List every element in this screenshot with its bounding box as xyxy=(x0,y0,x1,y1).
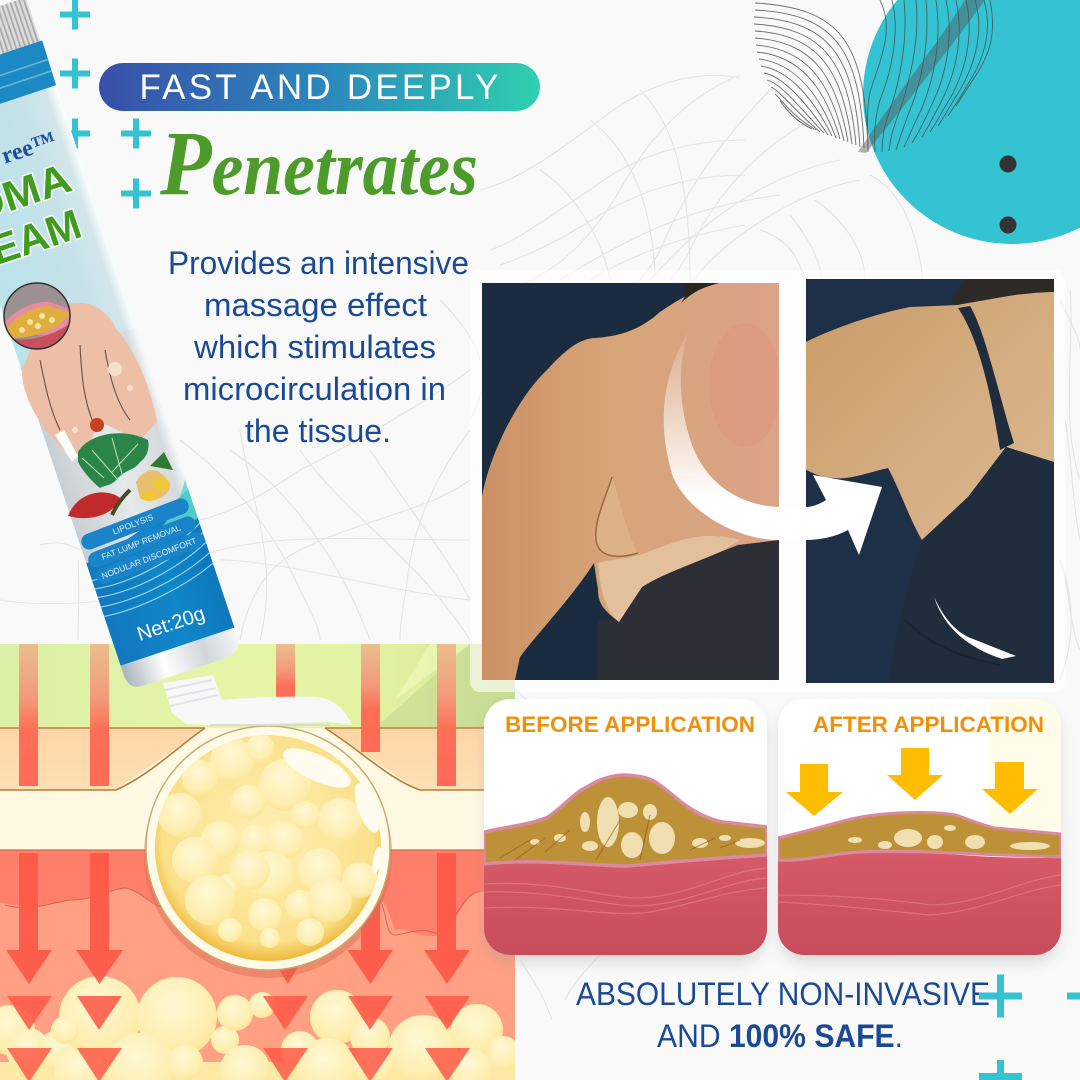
bra strap xyxy=(958,306,1014,450)
skin surface layer xyxy=(0,644,515,728)
tube herbs xyxy=(68,418,173,518)
tube upper blue band xyxy=(0,40,57,134)
icon: dense diagonal band xyxy=(858,0,985,153)
icon: line-art fan xyxy=(754,0,993,152)
decorative circle: teal with line-art fan xyxy=(754,0,1080,244)
red triangles second row xyxy=(7,996,470,1030)
tube ribbon labels xyxy=(79,496,206,586)
body text: the tissue. xyxy=(245,413,391,449)
tube brand text: ree™ xyxy=(0,127,59,170)
tube ribbon labels: FAT LUMP REMOVAL xyxy=(100,522,182,562)
fat layer with pink membrane xyxy=(484,775,767,866)
title: Penetrates: Penetrates xyxy=(159,112,478,214)
cream layer xyxy=(0,790,515,852)
before label: BEFORE APPLICATION xyxy=(505,712,755,737)
tissue red layer xyxy=(778,851,1061,955)
deep tissue layer xyxy=(0,888,515,1062)
tube ribbon labels: LIPOLYSIS xyxy=(111,512,155,537)
decorative plus signs top left xyxy=(60,0,151,208)
red triangles third row xyxy=(7,1048,470,1080)
tube inset circle xyxy=(3,282,71,350)
body text: Provides an intensive xyxy=(168,245,469,281)
peach layer xyxy=(0,728,484,790)
panel: before application xyxy=(484,699,767,955)
fat bubbles bottom layer xyxy=(0,976,520,1080)
body text: which stimulates xyxy=(193,329,436,365)
panel: after application xyxy=(778,699,1061,955)
bra left photo xyxy=(598,535,779,680)
yellow arrow left xyxy=(786,764,843,816)
photo frame xyxy=(470,270,1065,692)
yellow arrow centre xyxy=(887,748,943,800)
body text xyxy=(168,245,469,449)
bottom statement xyxy=(576,976,990,1054)
tube cream squeeze and nozzle xyxy=(163,675,352,725)
tube net weight: Net:20g xyxy=(134,603,208,646)
arm and torso xyxy=(482,283,779,680)
skin after photo xyxy=(806,288,1054,540)
panel shadows xyxy=(486,708,1059,962)
tube body xyxy=(0,85,204,565)
product tube xyxy=(0,0,247,700)
fat lump sphere xyxy=(144,726,392,978)
hair xyxy=(949,279,1054,305)
body text: massage effect xyxy=(204,287,427,323)
tissue red layer xyxy=(484,850,767,955)
red arrows lower xyxy=(6,853,470,984)
icon: dark dot top xyxy=(1000,156,1016,172)
tube product name xyxy=(0,154,87,283)
icon: dark dot bottom xyxy=(1000,216,1016,234)
curved transformation arrow xyxy=(664,333,882,555)
bottom statement: ABSOLUTELY NON-INVASIVE xyxy=(576,976,990,1012)
red arrows upper stripes xyxy=(19,644,456,786)
body text: microcirculation in xyxy=(183,371,446,407)
yellow arrow right xyxy=(982,762,1038,814)
decorative plus signs bottom right xyxy=(979,974,1080,1080)
tube silver crimp xyxy=(121,628,243,690)
after label: AFTER APPLICATION xyxy=(813,712,1044,737)
tube back illustration xyxy=(22,303,157,462)
bottom statement: AND 100% SAFE. xyxy=(657,1018,903,1054)
bra xyxy=(888,447,1054,683)
tube lower blue xyxy=(74,489,234,666)
fat layer with pink membrane xyxy=(778,812,1061,860)
after photo xyxy=(806,279,1054,683)
before photo xyxy=(482,283,781,680)
heading text: FAST AND DEEPLY xyxy=(140,68,498,107)
tube cap xyxy=(0,0,40,89)
heading pill xyxy=(99,63,540,111)
panel: skin cross-section illustration xyxy=(0,644,520,1080)
tube ribbon labels: NODULAR DISCOMFORT xyxy=(100,535,198,581)
